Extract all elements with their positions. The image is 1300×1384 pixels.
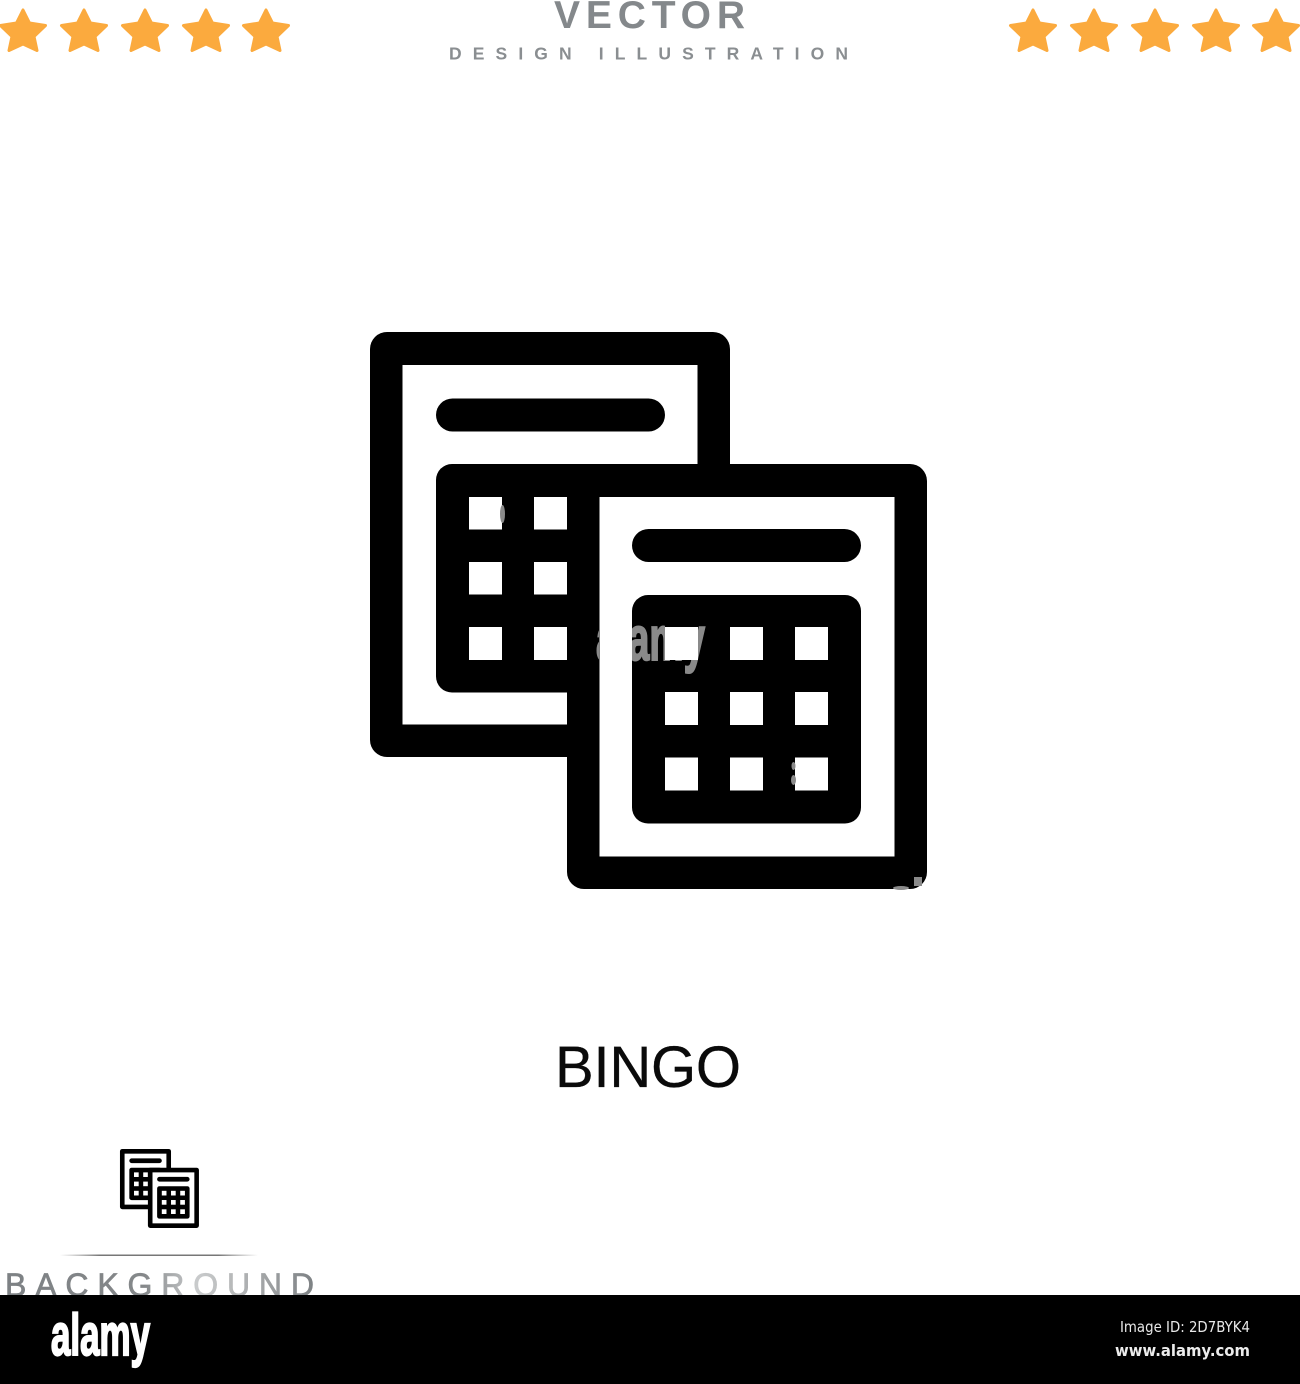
left rating stars xyxy=(0,10,288,50)
icon title: BINGO: BINGO xyxy=(555,1035,741,1100)
watermark fragments xyxy=(500,505,922,890)
small icon: bingo cards xyxy=(120,1149,199,1228)
footer logo: alamy: alamy xyxy=(51,1303,150,1368)
footer url: www.alamy.com xyxy=(1115,1341,1250,1360)
footer image id: Image ID: 2D7BYK4 xyxy=(1120,1318,1250,1336)
footer bar xyxy=(0,1295,1300,1384)
subheading: DESIGN ILLUSTRATION: DESIGN ILLUSTRATION xyxy=(449,44,848,64)
back bingo card xyxy=(370,332,730,757)
front bingo card xyxy=(567,464,927,889)
main icon: bingo cards xyxy=(370,332,927,889)
right rating stars xyxy=(1010,10,1298,50)
watermark over icon: alamy xyxy=(596,605,705,674)
label: BACKGROUND: BACKGROUND xyxy=(5,1267,314,1303)
